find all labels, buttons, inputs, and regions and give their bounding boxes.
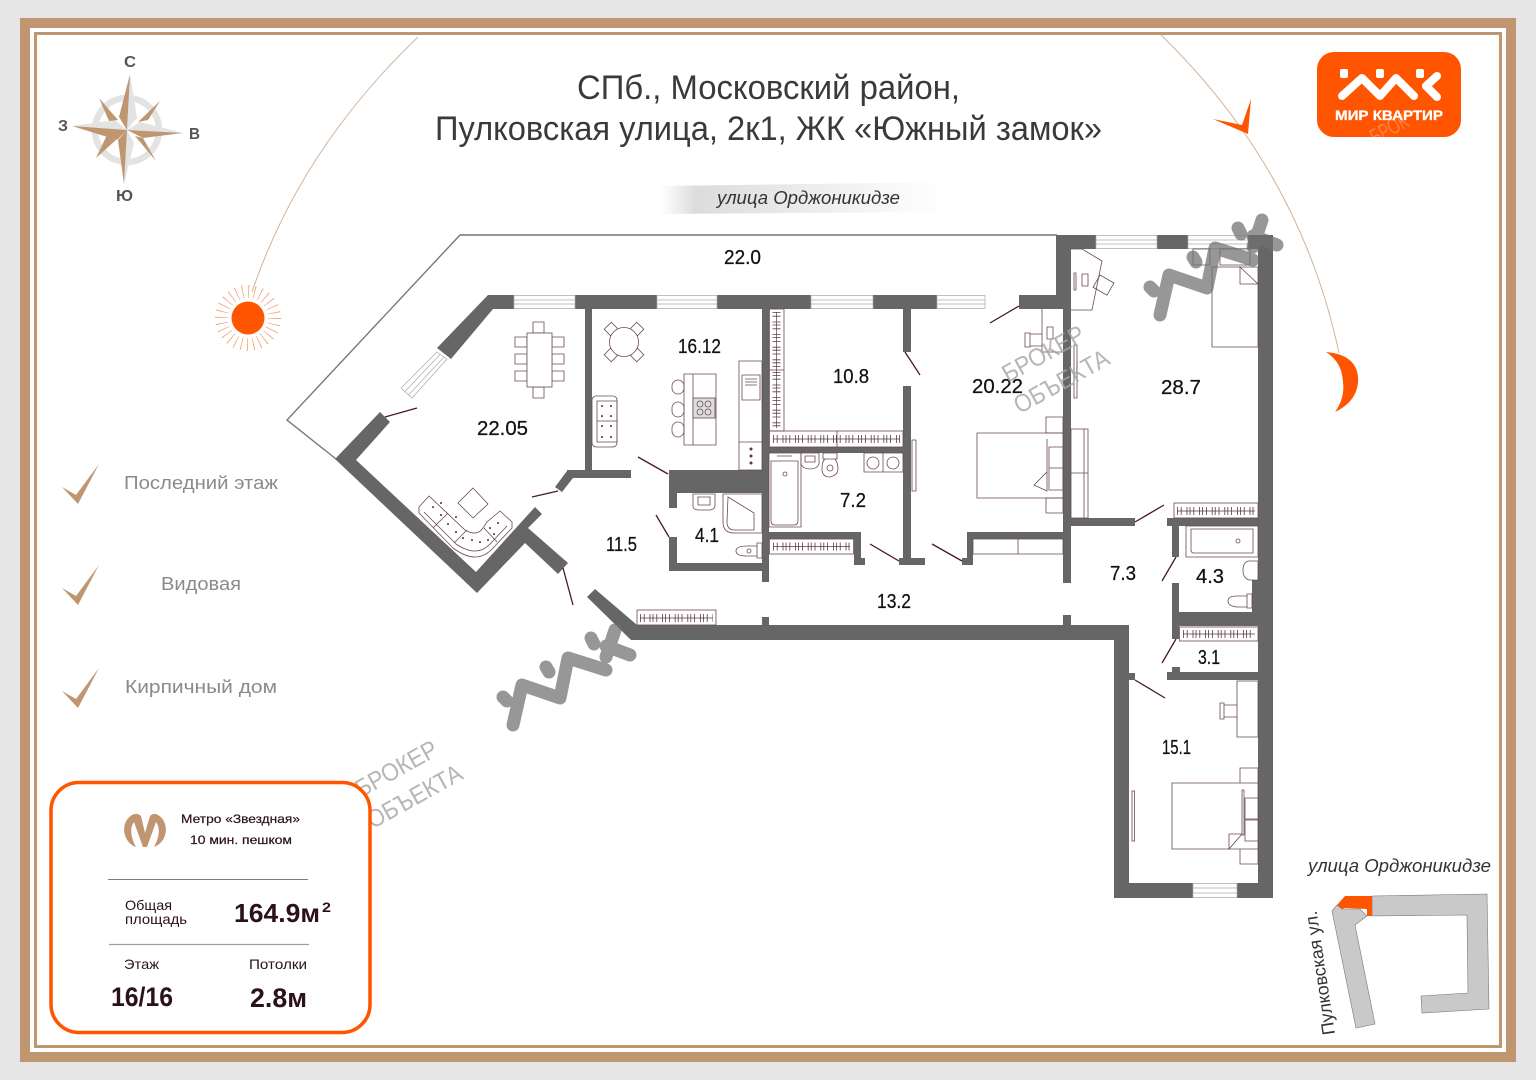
room areas: 7.3 (1110, 563, 1136, 585)
watermark: logo upper (1150, 220, 1277, 315)
total area value: 164.9м (234, 898, 320, 928)
total area label: Общая (125, 897, 172, 913)
room areas: 13.2 (877, 591, 911, 613)
compass labels (58, 54, 200, 205)
street band (660, 182, 955, 214)
title (435, 69, 1102, 148)
room areas: 7.2 (840, 490, 866, 512)
room areas: 22.0 (724, 247, 761, 269)
room areas: 20.22 (972, 376, 1023, 398)
compass labels: З (58, 118, 68, 135)
feature: view: Видовая (161, 574, 241, 594)
site plan street label vertical: Пулковская ул. (1301, 910, 1339, 1036)
watermark text upper: БРОКЕР (997, 320, 1090, 388)
windows (401, 236, 1248, 898)
compass labels: С (124, 54, 136, 71)
room areas: 15.1 (1162, 737, 1191, 759)
room areas: 4.3 (1196, 566, 1224, 588)
sun path arc (252, 37, 418, 292)
metro text (181, 812, 300, 847)
round table (604, 322, 644, 362)
bathroom 7.2 fixtures (769, 453, 903, 527)
corner sofa (419, 488, 512, 557)
room areas: 10.8 (833, 366, 869, 388)
total area label: площадь (125, 911, 187, 927)
walls (335, 235, 1273, 898)
site plan (1332, 894, 1489, 1028)
street label: улица Орджоникидзе (715, 188, 900, 208)
watermark text upper: ОБЪЕКТА (1009, 344, 1115, 420)
door swings (385, 306, 1176, 698)
total area value: 2 (322, 899, 331, 915)
metro text: 10 мин. пешком (190, 833, 292, 847)
logo: Mir Kvartir: МИР КВАРТИР (1335, 107, 1443, 123)
floor value: 16/16 (111, 982, 173, 1012)
metro text: Метро «Звездная» (181, 812, 300, 826)
total area label (125, 897, 187, 927)
bedroom 28.7 furniture (1071, 249, 1258, 347)
compass rose (72, 74, 183, 184)
bedroom 20.22 furniture (912, 309, 1077, 513)
site plan street label: улица Орджоникидзе (1306, 856, 1491, 876)
arrow on sun path (1213, 99, 1251, 134)
kitchen sofa (592, 396, 617, 447)
panel: feature list (62, 464, 278, 708)
floor label: Этаж (124, 956, 160, 972)
icon: check view (62, 565, 99, 605)
room areas: 4.1 (695, 525, 719, 547)
bathroom 4.3 fixtures (1186, 526, 1258, 608)
icon: check brick (62, 668, 99, 708)
room areas: 22.05 (477, 418, 528, 440)
room areas: 11.5 (606, 534, 637, 556)
room areas (477, 247, 1224, 759)
feature: last floor: Последний этаж (124, 473, 278, 493)
moon path arc (1161, 35, 1339, 353)
wardrobes (637, 309, 1258, 641)
feature: brick house: Кирпичный дом (125, 677, 277, 697)
title: Пулковская улица, 2к1, ЖК «Южный замок» (435, 110, 1102, 148)
icon: check last floor (62, 464, 99, 504)
room areas: 16.12 (678, 336, 721, 358)
kitchen island and counter (672, 361, 762, 470)
compass labels: В (189, 126, 200, 143)
dining set (515, 322, 564, 398)
icon: sun (222, 292, 274, 344)
bathroom 4.1 fixtures (693, 494, 762, 558)
watermark: logo lower (503, 630, 630, 725)
bedroom 15.1 furniture (1132, 681, 1258, 864)
watermark text on logo: БРОК (1365, 108, 1413, 149)
balcony outline (287, 235, 1057, 459)
ceiling label: Потолки (249, 956, 307, 972)
ceiling value: 2.8м (250, 983, 307, 1013)
watermark text lower: БРОКЕР (350, 735, 443, 803)
watermark text lower: ОБЪЕКТА (362, 759, 468, 835)
watermark text lower (346, 730, 468, 835)
icon: moon (1326, 352, 1358, 412)
panel: key facts card (51, 782, 370, 1032)
logo: Mir Kvartir (1317, 52, 1461, 137)
room areas: 28.7 (1161, 377, 1201, 399)
title: СПб., Московский район, (577, 69, 960, 107)
compass labels: Ю (116, 188, 133, 205)
icon: metro (124, 814, 166, 847)
room areas: 3.1 (1198, 647, 1220, 669)
floor plan (287, 235, 1273, 898)
watermark text upper (993, 315, 1115, 420)
